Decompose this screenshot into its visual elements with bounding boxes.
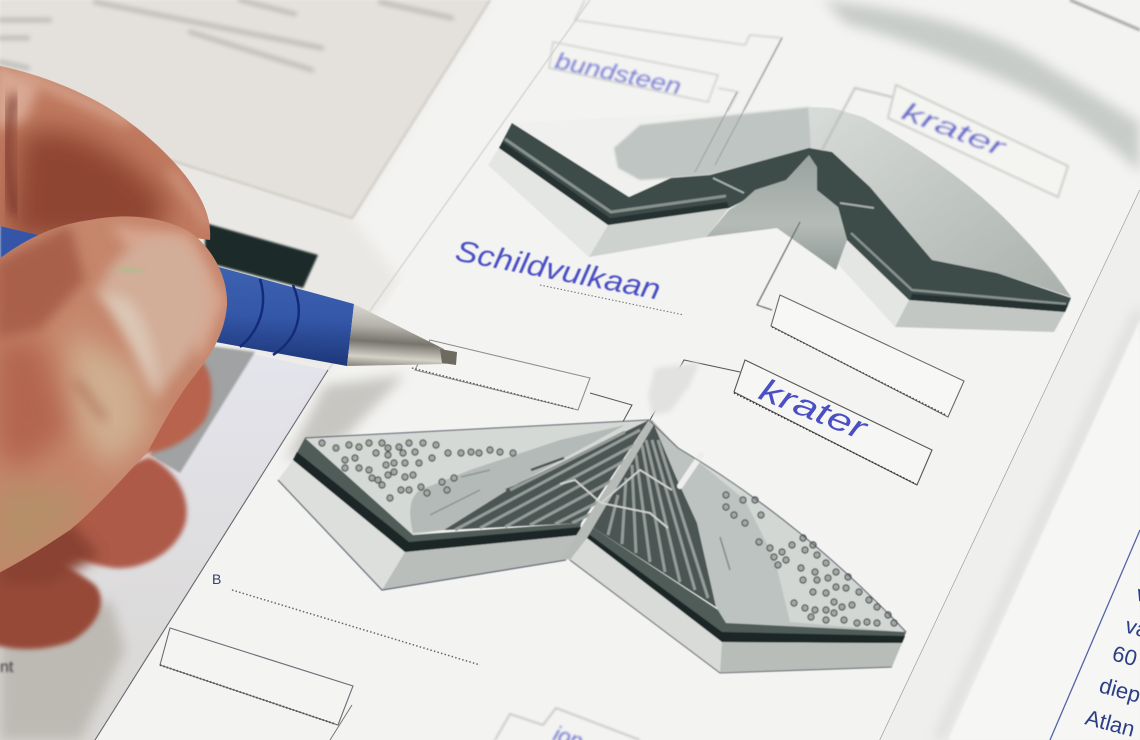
pen shadow on page bbox=[285, 375, 405, 462]
side box text bbox=[1083, 581, 1140, 740]
label box: bottom blurred with handwriting bbox=[495, 708, 640, 740]
lighter stratum bbox=[505, 139, 726, 212]
right base block bbox=[570, 538, 722, 673]
right surface bbox=[652, 420, 906, 632]
finger shadow bbox=[0, 600, 125, 740]
icon: pen bbox=[0, 215, 457, 366]
grey printed strip bbox=[150, 345, 255, 473]
side box text: 60 bbox=[1110, 641, 1140, 671]
label: B with dotted answer line bbox=[212, 571, 480, 665]
handwritten title: Schildvulkaan bbox=[453, 234, 684, 315]
magma chamber bbox=[706, 155, 847, 270]
surface right of crater bbox=[809, 107, 1071, 297]
grey ash patch left bbox=[410, 425, 625, 533]
metal tip bbox=[347, 304, 446, 366]
striped lava flank left bbox=[444, 420, 649, 530]
thumb dark upper left bbox=[0, 225, 85, 340]
panel: upper left page area bbox=[0, 0, 490, 370]
dark band left bbox=[499, 123, 1071, 312]
outline bbox=[305, 420, 906, 632]
lower fingers bbox=[0, 362, 212, 649]
right base bbox=[836, 240, 909, 327]
surface left of crater bbox=[512, 107, 812, 197]
gravel right bbox=[723, 492, 897, 626]
thumb tip highlight bbox=[110, 225, 225, 360]
panel: top label boxes and leader lines bbox=[549, 0, 782, 172]
dykes bbox=[560, 470, 672, 528]
diagram: stratovolcano bbox=[278, 420, 906, 673]
label box: empty left with pen tip bbox=[412, 340, 632, 442]
label box: krater lower with leader: krater bbox=[754, 371, 873, 447]
spine shadow bbox=[823, 0, 1140, 172]
panel: area left of worksheet edge bbox=[0, 223, 328, 740]
left surface bbox=[305, 420, 649, 535]
handwritten title: Schildvulkaan: Schildvulkaan bbox=[453, 234, 663, 307]
knuckle crease bbox=[75, 380, 105, 420]
white lava flow bbox=[680, 455, 701, 486]
volcano smoke plume bbox=[648, 362, 700, 415]
diagram: shield volcano bbox=[488, 38, 1071, 332]
label box: krater top with leader: krater bbox=[898, 96, 1011, 163]
label box: krater lower with leader bbox=[650, 360, 932, 485]
panel: right page with side box bbox=[880, 190, 1140, 740]
label box with handwriting: top blurred word: bundsteen bbox=[553, 47, 684, 100]
central vent channel bbox=[562, 420, 655, 560]
thumb nail bbox=[100, 237, 209, 395]
grey lava blob bbox=[614, 107, 812, 180]
pale knuckle bbox=[70, 330, 150, 470]
label: B with dotted answer line: B bbox=[212, 571, 221, 587]
pen barrel back bbox=[0, 215, 60, 262]
strata bands bbox=[293, 438, 581, 552]
reddish left bbox=[0, 340, 70, 470]
gravel left bbox=[319, 440, 516, 501]
nail green reflection bbox=[118, 268, 142, 272]
index finger bbox=[0, 66, 210, 240]
pen grip bbox=[210, 266, 354, 366]
yellow lower left bbox=[0, 484, 77, 560]
leader line bbox=[757, 222, 800, 310]
thumb bbox=[0, 210, 235, 580]
icon: hand holding pen bbox=[0, 60, 235, 649]
dykes bbox=[713, 178, 874, 208]
blurred text lines bbox=[0, 0, 452, 70]
label box: empty right bbox=[771, 295, 964, 417]
label box: krater top with leader bbox=[822, 85, 1068, 197]
left base bbox=[488, 148, 608, 257]
striped lava flank right bbox=[589, 420, 716, 607]
text: small blurred mark at left edge: nt bbox=[0, 659, 14, 676]
left base block bbox=[278, 460, 405, 590]
dark printed rectangle bbox=[205, 223, 318, 288]
label box: empty bottom left bbox=[160, 628, 353, 740]
